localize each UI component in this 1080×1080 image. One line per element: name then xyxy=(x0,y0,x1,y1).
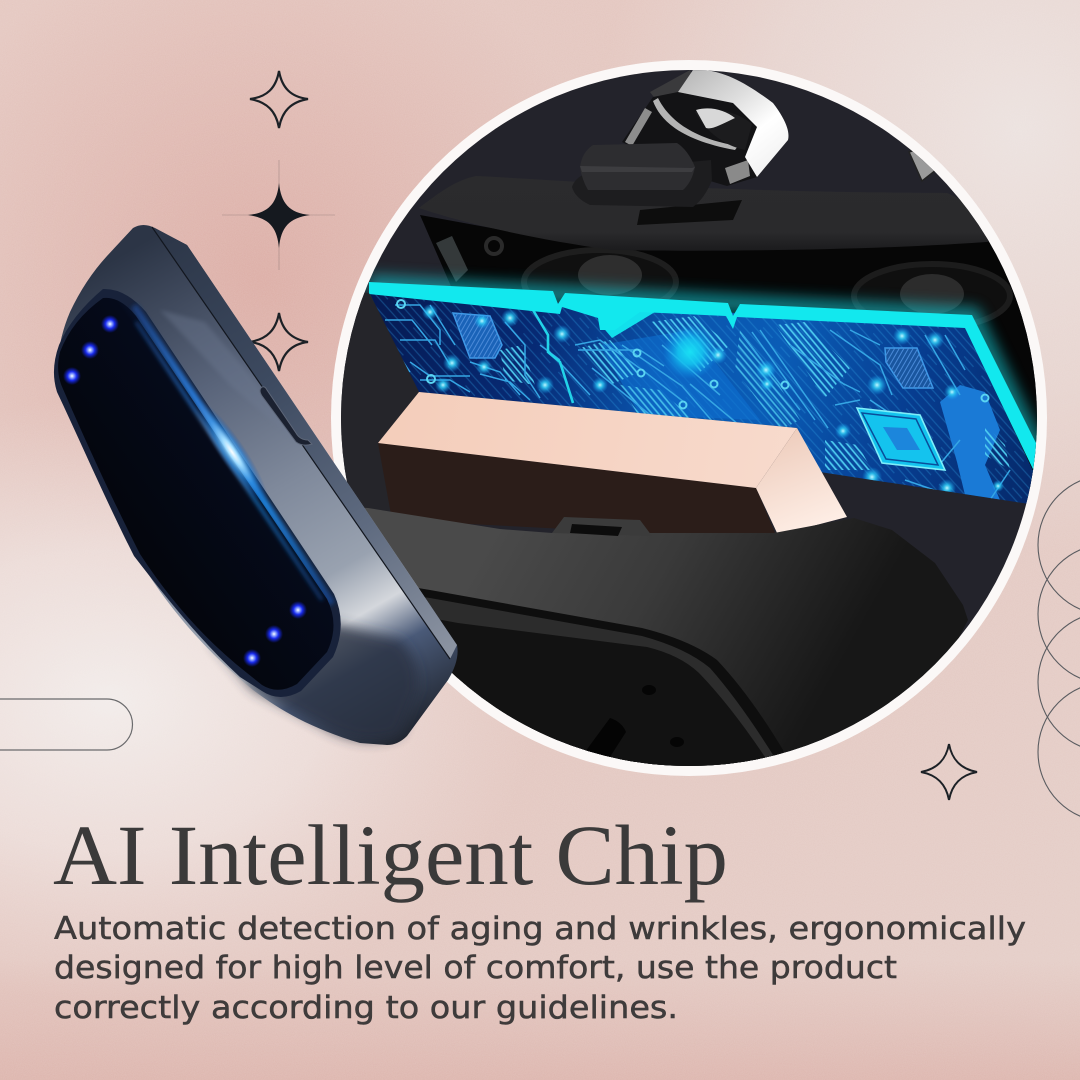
white lens border xyxy=(331,60,1047,776)
top curved slab xyxy=(492,198,989,251)
central CPU chip xyxy=(857,408,945,470)
central light flare xyxy=(187,393,277,511)
icon: filled sparkle with rays xyxy=(222,160,335,270)
lower shadow band xyxy=(210,624,418,741)
product device: LED beauty wand head xyxy=(54,225,458,745)
device outer shell xyxy=(56,225,458,745)
small chrome screw at right xyxy=(908,150,935,182)
cyan top patch xyxy=(605,312,654,338)
peach block xyxy=(378,392,847,540)
icon: outline sparkle lower right xyxy=(921,744,977,800)
glowing screen edge xyxy=(134,306,332,604)
speaker shapes in cavity xyxy=(436,236,1010,328)
circuit board xyxy=(369,282,1043,510)
upper side facet xyxy=(152,227,457,659)
dark cavity behind circuit board xyxy=(420,215,1050,500)
screen xyxy=(58,298,333,690)
body text: Automatic detection of aging and wrinkles, ergonomically xyxy=(54,911,1026,947)
screw holes xyxy=(642,685,656,695)
ring pads xyxy=(397,300,988,408)
glowing nodes xyxy=(422,304,1004,497)
bright blue zones on board xyxy=(940,385,1000,500)
cyan board frame xyxy=(369,282,1036,470)
teal glow above board xyxy=(369,284,1037,450)
screen recess xyxy=(54,289,341,697)
LED dots xyxy=(63,315,307,667)
chrome connector xyxy=(622,70,788,186)
body text xyxy=(54,911,1026,1026)
board face xyxy=(369,292,1042,505)
lens interior xyxy=(341,70,1037,766)
thin traces xyxy=(385,305,1010,500)
bright main trace xyxy=(533,310,573,403)
rubber tab on slab xyxy=(572,143,742,225)
dark wedge left of board xyxy=(341,292,419,482)
hex chip left xyxy=(453,313,502,358)
inner panel xyxy=(418,588,784,766)
icon: outline sparkle top xyxy=(250,71,308,128)
body text: correctly according to our guidelines. xyxy=(54,990,678,1026)
power button xyxy=(260,387,312,445)
body text: designed for high level of comfort, use the product xyxy=(54,950,897,986)
seam line xyxy=(152,227,450,659)
clip on lower body xyxy=(552,517,650,534)
decorative pill outline, left edge xyxy=(0,699,133,750)
hex chip right xyxy=(885,348,933,388)
facet highlight xyxy=(160,310,300,445)
dark lower body xyxy=(364,508,968,766)
screen edge light xyxy=(136,322,322,600)
comb traces on board xyxy=(775,322,850,398)
title: AI Intelligent Chip xyxy=(53,807,728,903)
icon: outline sparkle middle xyxy=(250,313,308,371)
decorative overlapping circles, right edge xyxy=(1038,475,1080,822)
circular close-up lens xyxy=(300,60,1050,800)
